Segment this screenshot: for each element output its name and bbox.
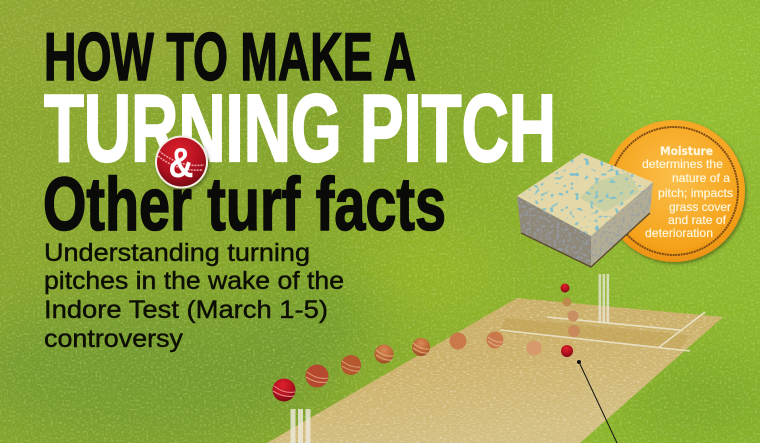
subtitle xyxy=(44,239,344,353)
subtitle: controversy xyxy=(44,325,184,353)
callout text: deterioration xyxy=(645,226,713,240)
title line 3: Other turf facts xyxy=(43,162,446,246)
leader line xyxy=(577,360,617,443)
title line 1: HOW TO MAKE A xyxy=(44,19,416,95)
soil block xyxy=(517,153,653,267)
subtitle: Indore Test (March 1-5) xyxy=(44,296,328,324)
callout text xyxy=(642,144,733,240)
callout text: grass cover xyxy=(669,200,731,214)
callout text: Moisture xyxy=(660,144,713,158)
near stumps xyxy=(290,409,310,443)
crease lines xyxy=(500,312,705,351)
cricket pitch xyxy=(267,298,723,443)
far stumps xyxy=(598,274,609,323)
ampersand ball icon xyxy=(155,136,208,188)
callout text: pitch; impacts xyxy=(658,186,733,200)
subtitle: pitches in the wake of the xyxy=(44,267,344,295)
callout text: determines the xyxy=(642,157,723,171)
ball trajectory xyxy=(272,284,580,402)
ampersand ball icon: & xyxy=(168,139,194,186)
subtitle: Understanding turning xyxy=(44,239,310,267)
pitch wear patch xyxy=(500,318,690,350)
callout text: nature of a xyxy=(672,171,730,185)
moisture callout xyxy=(603,120,745,262)
callout text: and rate of xyxy=(668,213,727,227)
